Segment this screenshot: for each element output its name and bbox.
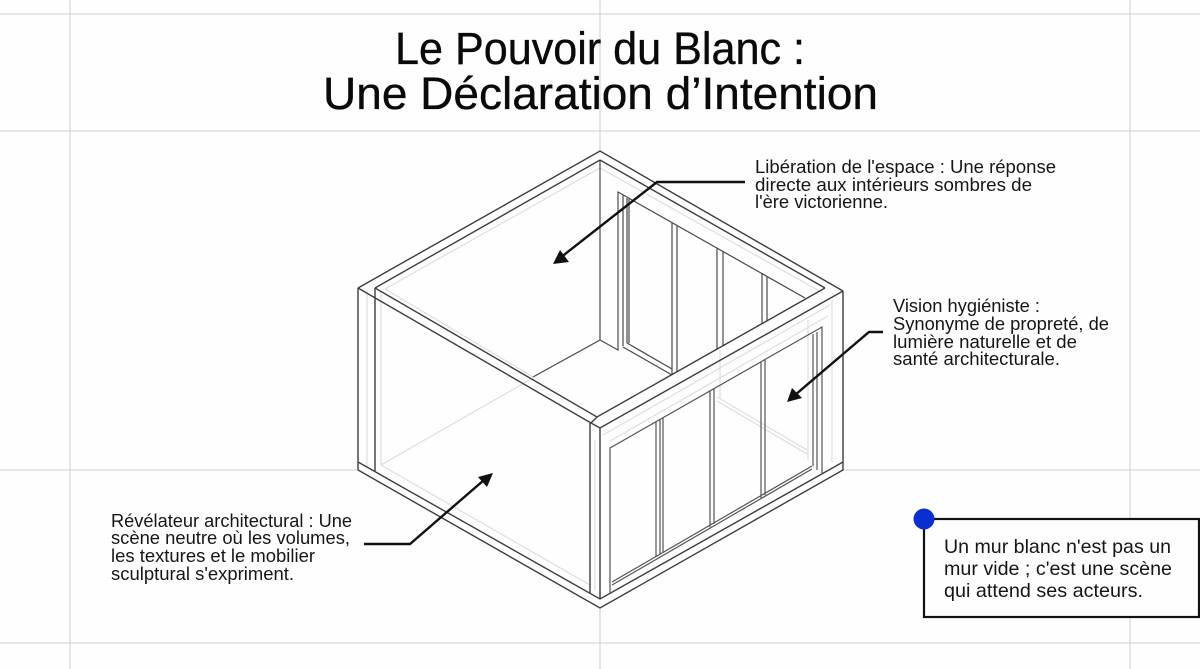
text: revelateur architectural: scène neutre où les volumes, xyxy=(111,527,350,548)
title: Une Déclaration d’Intention xyxy=(323,68,878,119)
text: liberation de l'espace xyxy=(755,156,1056,212)
arrow: vision xyxy=(787,332,883,402)
front window xyxy=(610,327,822,593)
text: vision hygieniste xyxy=(893,295,1109,369)
text: revelateur architectural: les textures et le mobilier xyxy=(111,545,315,566)
text: revelateur architectural xyxy=(111,510,352,584)
room white fill xyxy=(358,151,843,608)
text: vision hygieniste: Synonyme de propreté, de xyxy=(893,313,1109,334)
outer rim and walls xyxy=(358,151,843,608)
text: liberation de l'espace: directe aux intérieurs sombres de xyxy=(755,174,1032,195)
text: liberation de l'espace: l'ère victorienne. xyxy=(755,191,888,212)
arrow: liberation xyxy=(553,182,745,264)
back wall and window xyxy=(533,160,805,377)
text: vision hygieniste: lumière naturelle et de xyxy=(893,331,1077,352)
text: liberation de l'espace: Libération de l'espace : Une réponse xyxy=(755,156,1056,177)
callout blue dot xyxy=(914,508,934,530)
text: vision hygieniste: santé architecturale. xyxy=(893,348,1060,369)
callout text: qui attend ses acteurs. xyxy=(944,580,1143,602)
callout text xyxy=(944,536,1172,602)
isometric white room drawing xyxy=(358,151,843,608)
title xyxy=(323,23,878,119)
callout text: Un mur blanc n'est pas un xyxy=(944,536,1171,558)
text: vision hygieniste: Vision hygiéniste : xyxy=(893,295,1040,316)
callout text: mur vide ; c'est une scène xyxy=(944,558,1172,580)
text: revelateur architectural: Révélateur architectural : Une xyxy=(111,510,352,531)
arrow: revelateur xyxy=(364,473,493,544)
callout xyxy=(914,508,1199,617)
text: revelateur architectural: sculptural s'expriment. xyxy=(111,563,294,584)
faint hidden lines xyxy=(367,168,832,590)
title: Le Pouvoir du Blanc : xyxy=(395,23,805,74)
